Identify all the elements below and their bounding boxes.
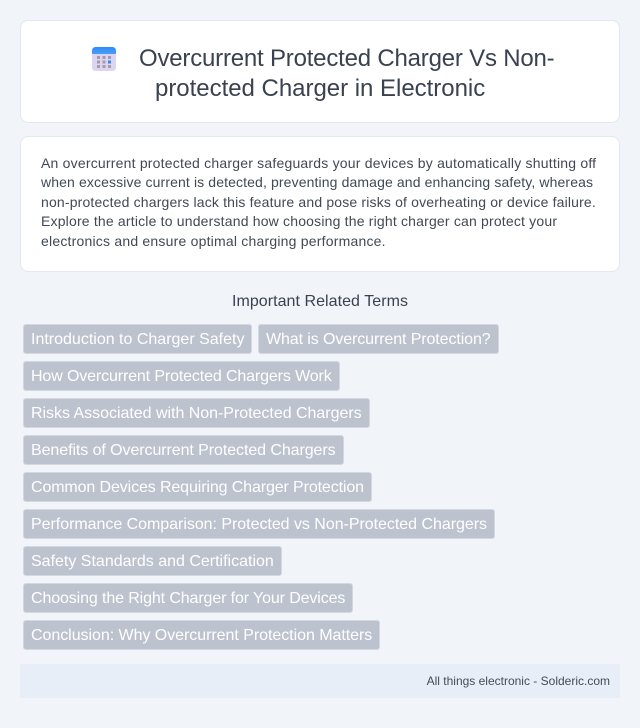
tag: Safety Standards and Certification: [31, 553, 274, 570]
footer: [20, 664, 620, 698]
title: Overcurrent Protected Charger Vs Non-: [139, 45, 554, 72]
icon: calendar: [92, 47, 116, 71]
heading: important related terms: Important Related Terms: [232, 293, 408, 310]
tag: Benefits of Overcurrent Protected Chargers: [31, 442, 336, 459]
tag: [23, 583, 353, 613]
tag: [23, 361, 340, 391]
tag: [23, 509, 495, 539]
text block: introduction: non-protected chargers lack this feature and pose risks of overheating or device failure.: [41, 194, 596, 210]
tag: What is Overcurrent Protection?: [266, 331, 491, 348]
tag: [23, 546, 282, 576]
tag: [23, 435, 344, 465]
text block: introduction: when excessive current is detected, preventing damage and enhancing safety, whereas: [41, 174, 593, 190]
text block: introduction: An overcurrent protected charger safeguards your devices by automatically shutting off: [41, 155, 596, 171]
panel: title card: [20, 20, 620, 123]
tag: [23, 472, 372, 502]
tag: Risks Associated with Non-Protected Chargers: [31, 405, 362, 422]
text block: introduction: [41, 155, 596, 249]
list: related term tags: [23, 324, 499, 650]
text block: introduction: Explore the article to understand how choosing the right charger can protect your: [41, 213, 557, 229]
title: protected Charger in Electronic: [155, 75, 485, 102]
tag: [23, 620, 380, 650]
title: [139, 45, 554, 102]
tag: Introduction to Charger Safety: [31, 331, 244, 348]
tag: How Overcurrent Protected Chargers Work: [31, 368, 332, 385]
tag: Performance Comparison: Protected vs Non-Protected Chargers: [31, 516, 487, 533]
tag: Common Devices Requiring Charger Protection: [31, 479, 364, 496]
footer: All things electronic - Solderic.com: [427, 674, 610, 688]
tag: [23, 324, 252, 354]
text block: introduction: electronics and ensure optimal charging performance.: [41, 233, 386, 249]
tag: Choosing the Right Charger for Your Devices: [31, 590, 345, 607]
panel: introduction text: [20, 136, 620, 272]
tag: [23, 398, 370, 428]
tag: [258, 324, 499, 354]
tag: Conclusion: Why Overcurrent Protection Matters: [31, 627, 372, 644]
